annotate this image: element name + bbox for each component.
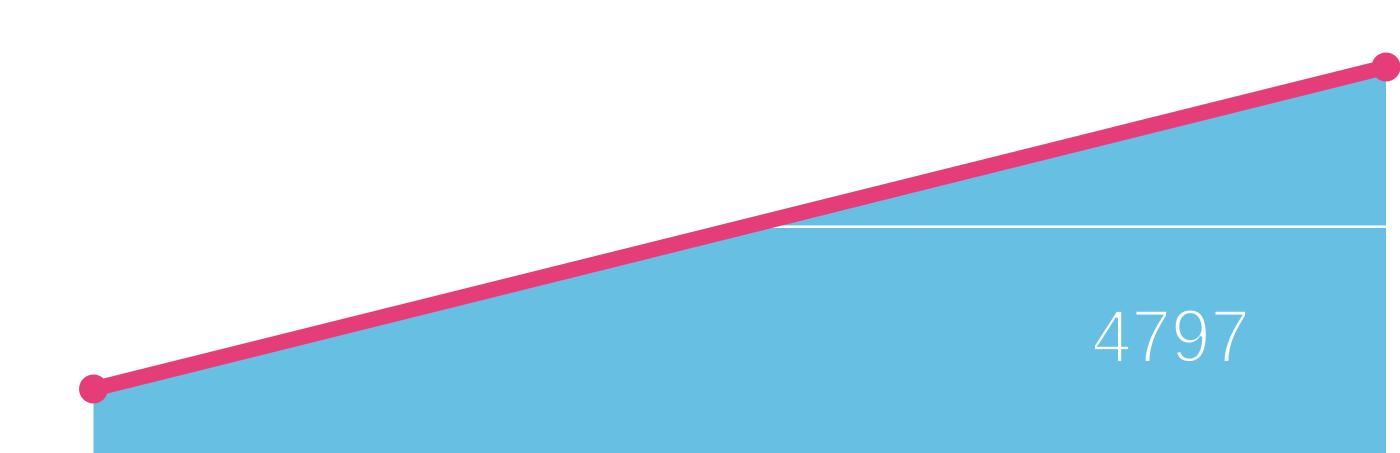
pink trend line with end markers (79, 52, 1400, 404)
value label: 4797 (1092, 294, 1250, 378)
blue area under line (94, 67, 1386, 453)
